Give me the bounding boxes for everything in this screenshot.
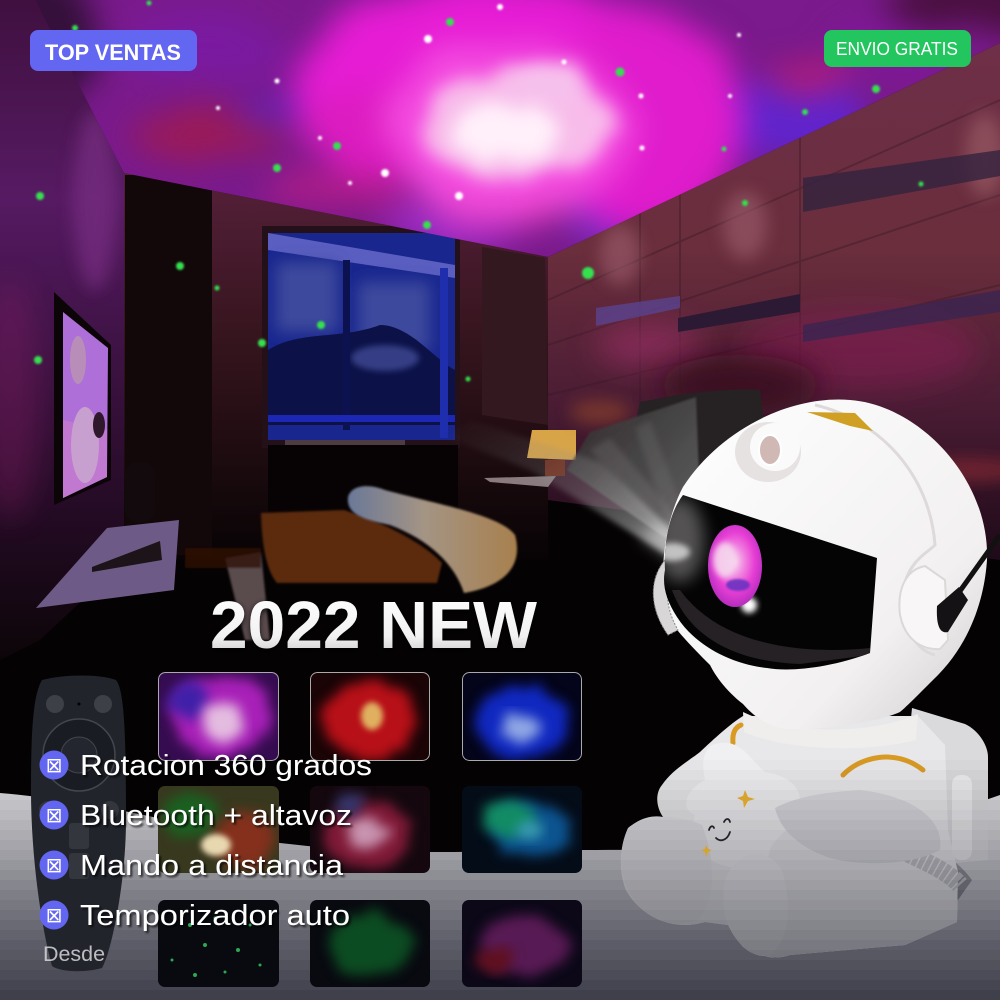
right wall dark window strips	[596, 150, 1000, 342]
feature: Mando a distancia: Mando a distancia	[80, 850, 344, 882]
thumbnail: violet nebula	[462, 900, 582, 987]
feature: Temporizador auto: ⊠	[46, 903, 62, 927]
feature: Rotacion 360 grados: ⊠	[46, 753, 62, 777]
thumbnail: green nebula	[310, 900, 430, 987]
feature: Bluetooth + altavoz: ⊠	[46, 803, 62, 827]
heading: 2022 NEW: 2022 NEW	[210, 588, 538, 663]
TV	[54, 292, 111, 505]
visor highlights	[654, 498, 870, 664]
backpack tube	[952, 775, 972, 860]
helmet shell	[663, 400, 987, 729]
background: bedroom scene	[0, 0, 1000, 660]
dark sofa behind astronaut	[620, 390, 770, 500]
feature: Bluetooth + altavoz: Bluetooth + altavoz	[80, 800, 352, 832]
window	[262, 226, 460, 448]
thumbnail: pink and red nebula	[310, 786, 430, 873]
astronaut projector	[600, 400, 1000, 960]
thumbnail: red nebula	[310, 672, 430, 761]
gold shoulder stripe left	[733, 725, 741, 743]
feature: Rotacion 360 grados: Rotacion 360 grados	[80, 750, 372, 782]
label: Desde: Desde	[43, 943, 105, 966]
black visor	[664, 495, 877, 669]
bed headboard dark	[268, 445, 458, 515]
helmet mesh collar	[653, 560, 678, 635]
hose	[885, 842, 960, 885]
TV stand	[36, 462, 179, 608]
stars: green and white points	[34, 0, 924, 382]
right wall	[548, 43, 1000, 560]
magenta lens	[708, 525, 762, 607]
back wall column	[482, 247, 548, 425]
back wall	[124, 173, 548, 560]
floor curve	[0, 790, 1000, 1000]
gold shoulder stripe right	[843, 757, 923, 775]
neck collar	[743, 712, 918, 748]
thumbnail: teal nebula	[462, 786, 582, 873]
thumbnail: green stars	[158, 900, 279, 987]
badge: ENVIO GRATIS: ENVIO GRATIS	[836, 39, 958, 59]
lower body shading	[620, 770, 988, 958]
badge: ENVIO GRATIS	[824, 30, 971, 67]
thumbnail grid: nebula colours	[158, 672, 582, 987]
feature: Mando a distancia: ⊠	[46, 853, 62, 877]
star cushion	[686, 743, 800, 869]
thumbnail: blue nebula	[462, 672, 582, 761]
badge: TOP VENTAS: TOP VENTAS	[45, 40, 181, 65]
cushion face	[709, 819, 730, 840]
cable and plug	[937, 535, 1000, 632]
gold warning label	[807, 412, 873, 431]
foot right	[723, 854, 788, 956]
right wall glow spots	[595, 113, 1000, 482]
thumbnail: green and red nebula	[158, 786, 279, 873]
thumbnail: purple nebula	[158, 672, 279, 761]
bed roll	[348, 486, 517, 593]
badge: TOP VENTAS	[30, 30, 197, 71]
ear cup	[899, 566, 948, 649]
gold stars on cushion	[701, 790, 755, 857]
left wall	[0, 0, 125, 660]
right arm hugging	[775, 790, 940, 863]
bedside lamp	[484, 400, 630, 487]
right wall panel lines	[548, 100, 1000, 420]
helmet ridge	[815, 405, 935, 655]
body silhouette	[621, 716, 958, 957]
camera bump	[735, 422, 801, 482]
light beam from the lens	[446, 397, 700, 570]
nebula projected on ceiling	[0, 0, 1000, 260]
bench	[185, 510, 442, 640]
feature: Temporizador auto: Temporizador auto	[80, 900, 350, 932]
feature list	[40, 750, 372, 932]
remote control	[31, 676, 126, 971]
curtain	[125, 175, 212, 555]
backpack	[905, 708, 988, 864]
foot left	[621, 817, 712, 923]
